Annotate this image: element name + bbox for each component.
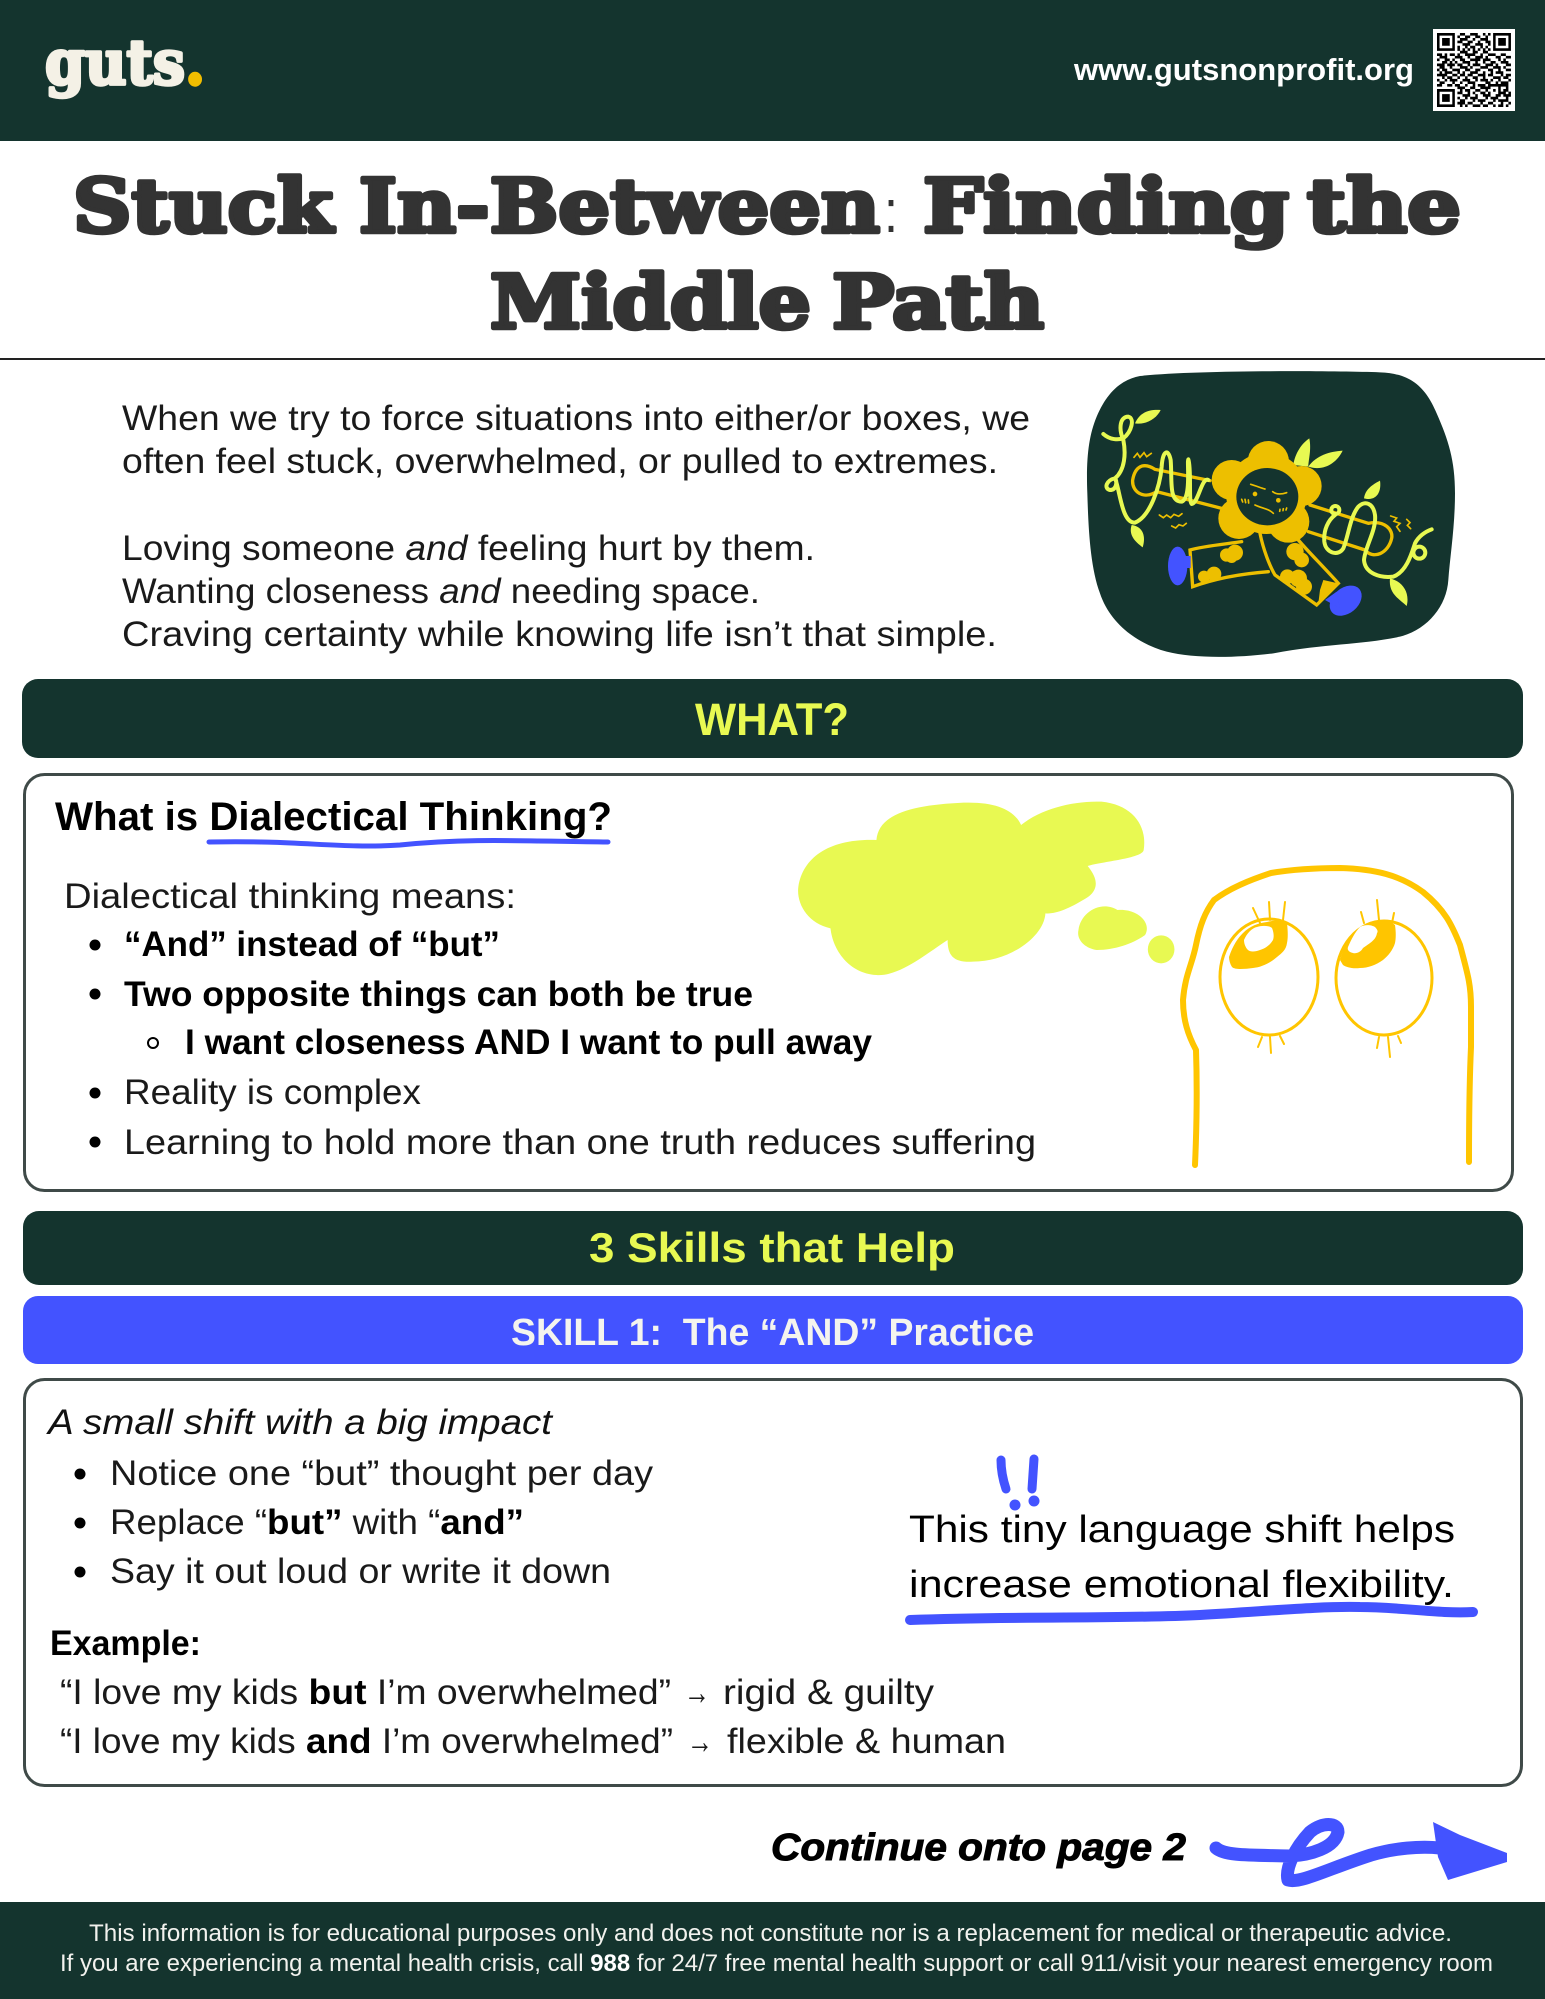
- qr code: [1433, 29, 1515, 111]
- title: Path: [832, 260, 1044, 346]
- disclaimer text: [60, 1920, 1493, 1977]
- callout: increase emotional flexibility.: [909, 1564, 1454, 1606]
- illustration: face looking up: [1183, 868, 1471, 1165]
- continue note: Continue onto page 2: [771, 1827, 1186, 1869]
- example: “I love my kids but I’m overwhelmed”: [60, 1673, 671, 1712]
- title: :: [884, 178, 898, 245]
- bullet list: Learning to hold more than one truth reduces suffering: [124, 1123, 1036, 1162]
- what? bar: WHAT?: [695, 694, 849, 745]
- bullet list: “And” instead of “but”: [124, 925, 500, 964]
- intro text: When we try to force situations into either/or boxes, we: [122, 399, 1030, 438]
- panel heading: What is Dialectical Thinking?: [55, 795, 612, 839]
- disclaimer text: This information is for educational purposes only and does not constitute nor is a replacement for medical or therapeutic advice.: [89, 1920, 1452, 1947]
- arrow: [1216, 1822, 1507, 1881]
- intro text: Craving certainty while knowing life isn’t that simple.: [122, 615, 997, 654]
- header band: [0, 0, 1545, 141]
- 3 skills bar: [23, 1211, 1523, 1285]
- bullet list: Reality is complex: [124, 1073, 422, 1112]
- what? bar: [22, 679, 1523, 758]
- logo: guts: guts.: [45, 26, 205, 99]
- website url: www.gutsnonprofit.org: [1073, 52, 1414, 87]
- skill steps: Say it out loud or write it down: [110, 1552, 611, 1591]
- title: the: [1307, 164, 1461, 250]
- title: Stuck: [73, 164, 335, 250]
- example: [50, 1624, 1006, 1761]
- panel: what is dialectical thinking: [24, 774, 1512, 1190]
- bullet list: Two opposite things can both be true: [124, 975, 753, 1014]
- example: “I love my kids and I’m overwhelmed”: [60, 1722, 673, 1761]
- 3 skills bar: 3 Skills that Help: [589, 1224, 955, 1271]
- skill 1 bar: [23, 1296, 1523, 1364]
- intro text: Loving someone and feeling hurt by them.: [122, 529, 815, 568]
- list lead-in: Dialectical thinking means:: [64, 877, 516, 916]
- panel: skill 1: [24, 1380, 1522, 1786]
- skill 1 bar: SKILL 1: The “AND” Practice: [511, 1312, 1034, 1354]
- example: Example:: [50, 1624, 201, 1663]
- skill steps: Replace “but” with “and”: [110, 1503, 524, 1542]
- bullet list: [90, 925, 1036, 1162]
- example: →: [684, 1673, 710, 1712]
- skill steps: [74, 1454, 654, 1591]
- intro text: often feel stuck, overwhelmed, or pulled to extremes.: [122, 442, 998, 481]
- intro text: [122, 399, 1030, 654]
- callout: [909, 1509, 1473, 1620]
- icon: exclamation marks: [1001, 1459, 1040, 1510]
- skill subtitle: A small shift with a big impact: [46, 1403, 553, 1442]
- illustration: flower character pulled by vines: [1087, 371, 1455, 657]
- bullet list: I want closeness AND I want to pull away: [185, 1023, 873, 1062]
- example: flexible & human: [727, 1722, 1006, 1761]
- example: rigid & guilty: [723, 1673, 935, 1712]
- eye pupils: [1229, 921, 1396, 969]
- footer: [0, 1902, 1545, 1999]
- title: [73, 164, 1461, 346]
- title: Middle: [490, 260, 811, 346]
- title: Finding: [923, 164, 1289, 250]
- heading underline: [209, 840, 608, 846]
- intro text: Wanting closeness and needing space.: [122, 572, 760, 611]
- title: In-Between: [359, 164, 880, 250]
- disclaimer text: If you are experiencing a mental health crisis, call 988 for 24/7 free mental health support or call 911/visit your nearest emergency room: [60, 1950, 1493, 1977]
- example: →: [687, 1722, 713, 1761]
- skill steps: Notice one “but” thought per day: [110, 1454, 654, 1493]
- thought bubble: [798, 802, 1174, 975]
- callout: This tiny language shift helps: [909, 1509, 1455, 1551]
